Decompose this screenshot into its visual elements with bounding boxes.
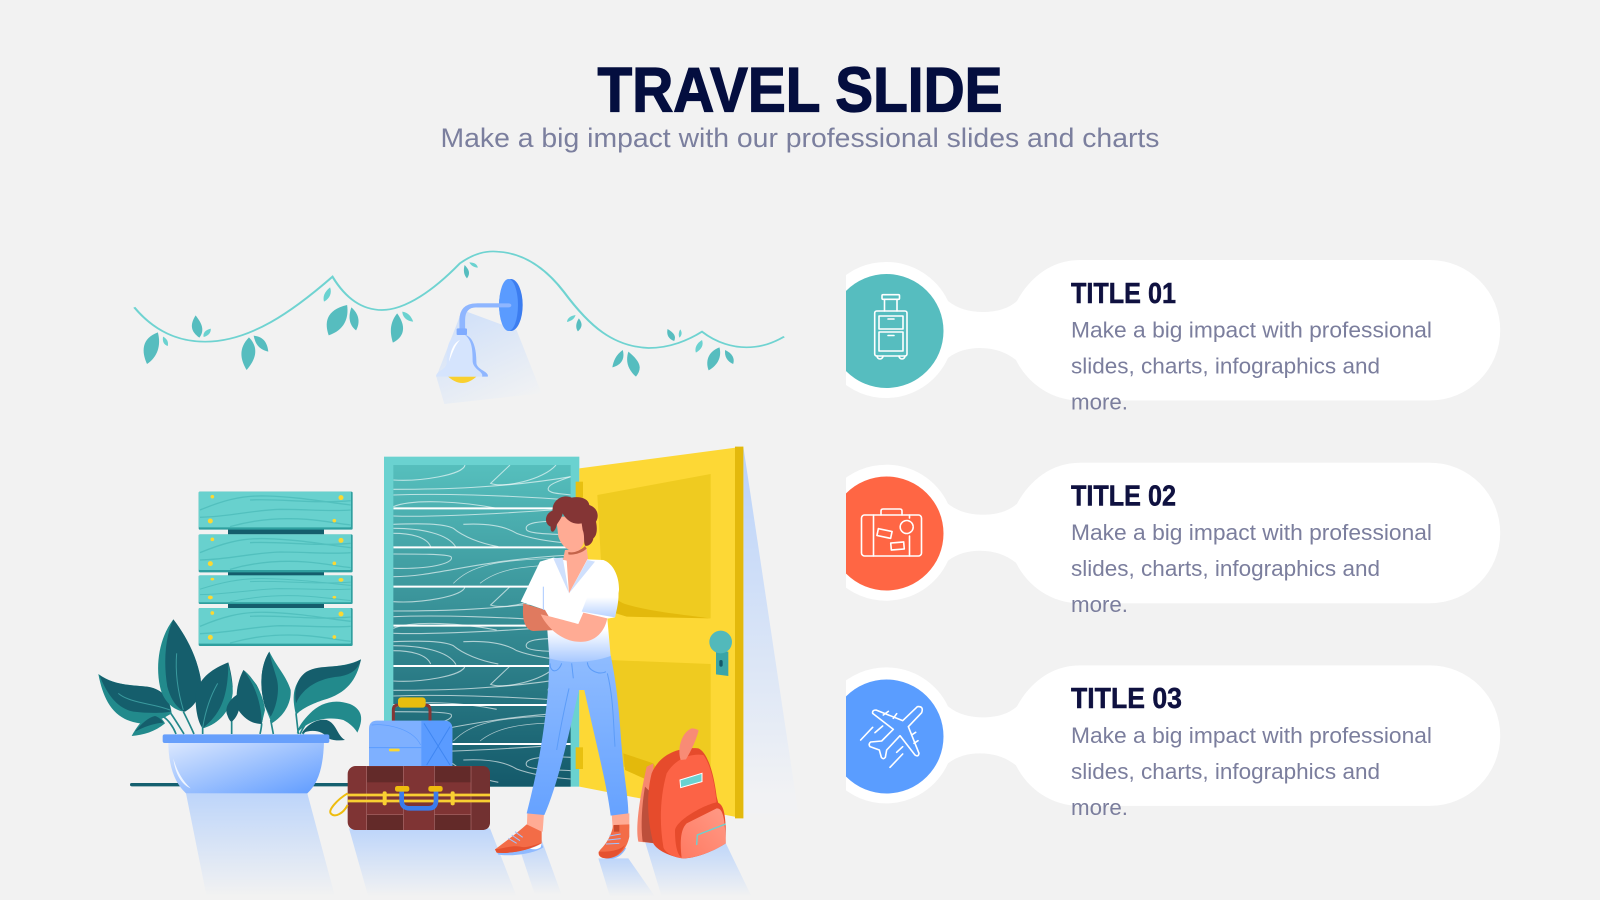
door knob bbox=[709, 631, 732, 676]
icon: rolling suitcase bbox=[875, 295, 907, 359]
door frame bbox=[384, 457, 579, 787]
lamp bbox=[436, 279, 523, 383]
card 03 shape bbox=[818, 665, 1500, 806]
illustration: door bbox=[384, 447, 743, 818]
plant pot bbox=[163, 734, 329, 793]
card 01 text bbox=[1071, 317, 1432, 414]
illustration: traveller bbox=[495, 496, 629, 859]
arms bbox=[523, 587, 619, 642]
vine string bbox=[134, 251, 784, 348]
lamp light beam bbox=[436, 310, 542, 404]
card 01 bbox=[818, 260, 1500, 414]
plant stems bbox=[163, 708, 320, 734]
illustration: potted plant bbox=[98, 619, 361, 793]
neck bbox=[563, 548, 588, 595]
vine light leaves bbox=[163, 262, 703, 353]
floor shadows bbox=[132, 447, 798, 897]
door wood grain bbox=[393, 465, 571, 783]
card 03 text: Make a big impact with professional bbox=[1071, 723, 1432, 748]
blue bag bbox=[369, 697, 452, 767]
card 01 text: slides, charts, infographics and bbox=[1071, 353, 1380, 378]
card 01 text: more. bbox=[1071, 390, 1128, 414]
icon: airplane bbox=[861, 707, 922, 767]
card 02 text bbox=[1071, 520, 1432, 617]
card 03 text bbox=[1071, 723, 1432, 820]
illustration: luggage bbox=[330, 697, 490, 830]
icon: briefcase bbox=[862, 509, 922, 556]
head and hair bbox=[546, 496, 598, 555]
card 02 text: slides, charts, infographics and bbox=[1071, 556, 1380, 581]
card 03 text: slides, charts, infographics and bbox=[1071, 759, 1380, 784]
jeans bbox=[527, 655, 628, 816]
card 01 circle bbox=[846, 274, 944, 388]
card 03 bbox=[818, 665, 1500, 820]
brown suitcase bbox=[330, 766, 490, 830]
card 03 circle bbox=[846, 680, 944, 794]
card 03 title: TITLE 03 bbox=[1071, 683, 1182, 715]
card 02 bbox=[818, 463, 1500, 617]
open yellow door bbox=[579, 447, 743, 818]
card 01 title: TITLE 01 bbox=[1071, 278, 1176, 310]
card 01 text: Make a big impact with professional bbox=[1071, 317, 1432, 342]
vine leaves bbox=[144, 265, 734, 377]
illustration: string of leaves and wall lamp bbox=[134, 251, 784, 404]
illustration: backpack bbox=[637, 728, 726, 858]
card 02 shape bbox=[818, 463, 1500, 603]
card 02 title: TITLE 02 bbox=[1071, 480, 1176, 512]
card 02 circle bbox=[846, 476, 944, 590]
card 03 text: more. bbox=[1071, 795, 1128, 820]
subtitle: Make a big impact with our professional slides and charts bbox=[440, 123, 1160, 153]
card 02 text: more. bbox=[1071, 592, 1128, 617]
plant leaves bbox=[98, 619, 361, 740]
shirt bbox=[521, 558, 619, 662]
title: TRAVEL SLIDE bbox=[598, 56, 1002, 126]
card 01 shape bbox=[818, 260, 1500, 400]
illustration: wooden sign bbox=[199, 492, 353, 646]
feet and shoes bbox=[495, 813, 629, 859]
card 02 text: Make a big impact with professional bbox=[1071, 520, 1432, 545]
